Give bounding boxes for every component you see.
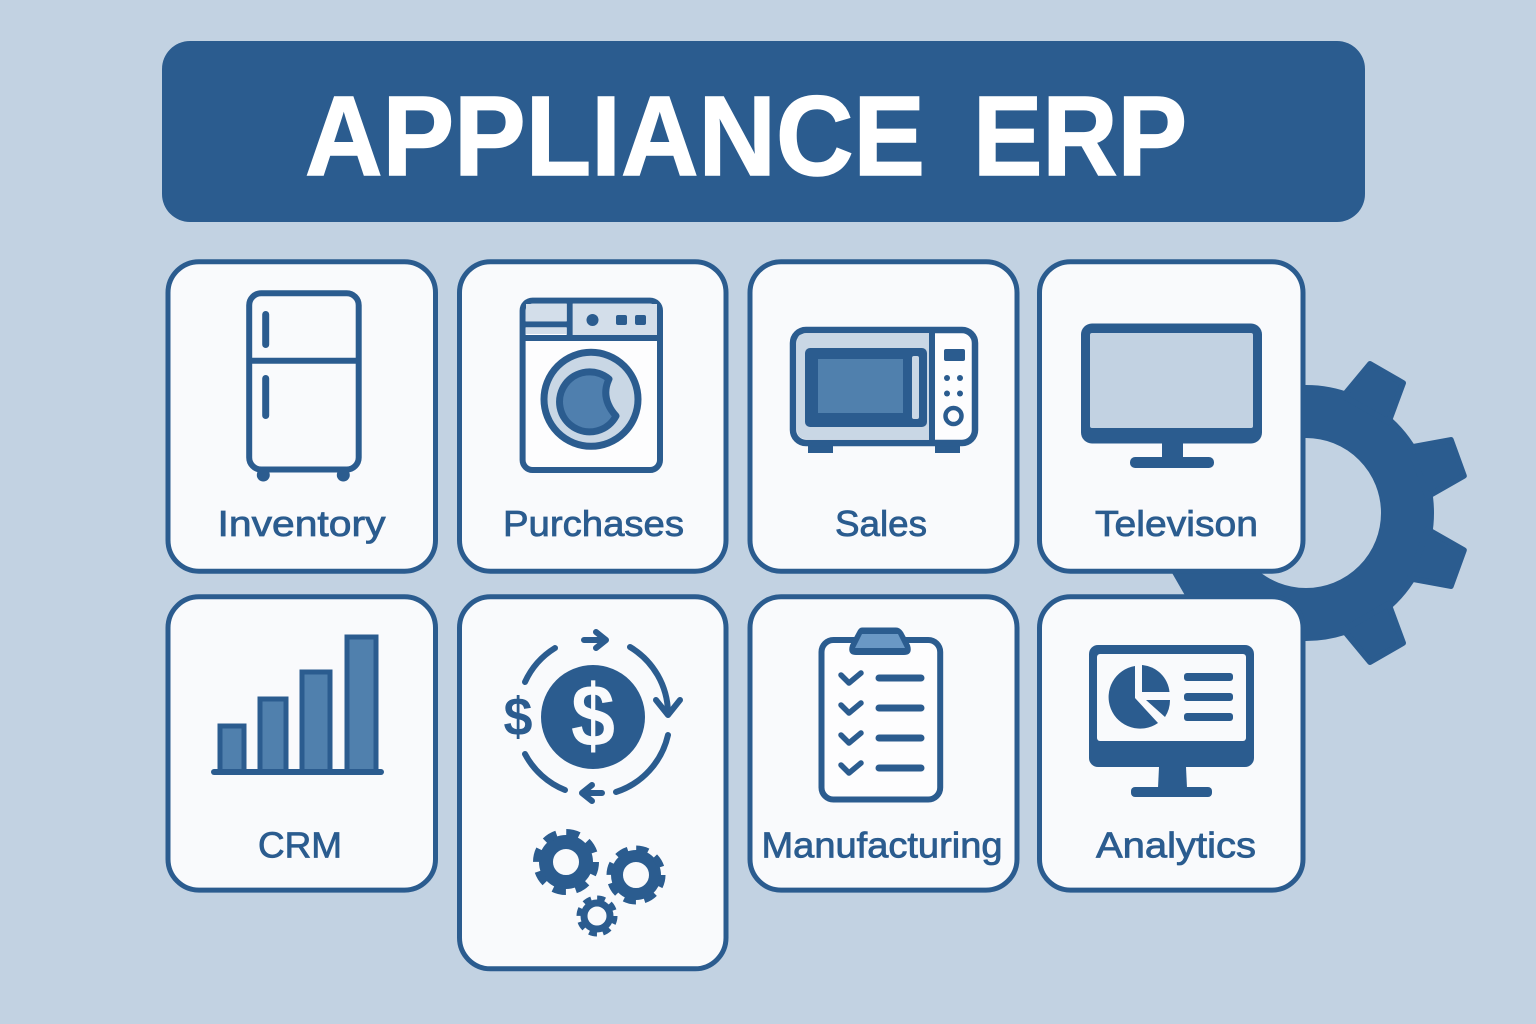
label: Manufacturing: Manufacturing	[762, 824, 1002, 866]
label: Televison: Televison	[1095, 503, 1258, 544]
icon: large background gear	[1169, 361, 1466, 665]
icon: bar chart	[214, 637, 381, 772]
card: Analytics	[1040, 597, 1303, 890]
icon: microwave	[793, 329, 975, 453]
card: Manufacturing	[750, 597, 1017, 890]
card: CRM	[168, 597, 436, 890]
label: Analytics: Analytics	[1096, 824, 1256, 866]
icon: money cycle: $	[571, 666, 615, 765]
icon: refrigerator	[249, 293, 359, 482]
card: Sales	[750, 262, 1017, 571]
icon: checklist clipboard	[822, 628, 940, 800]
icon: money cycle: $	[504, 687, 532, 747]
title banner	[162, 41, 1365, 222]
card: Inventory	[168, 262, 436, 571]
icon: washing machine	[522, 300, 660, 470]
icon: television	[1081, 324, 1262, 468]
card: Television	[1040, 262, 1303, 571]
icon: analytics monitor	[1089, 645, 1254, 797]
icon: money cycle	[504, 632, 680, 801]
card: Purchases	[460, 262, 726, 571]
label: CRM: CRM	[258, 824, 342, 866]
label: Purchases: Purchases	[503, 503, 684, 544]
title: APPLIANCE	[305, 73, 925, 199]
label: Inventory: Inventory	[218, 503, 386, 544]
card: finance and operations	[460, 597, 726, 969]
label: Sales: Sales	[835, 503, 927, 544]
icon: three gears	[537, 833, 662, 934]
title: ERP	[973, 73, 1187, 199]
